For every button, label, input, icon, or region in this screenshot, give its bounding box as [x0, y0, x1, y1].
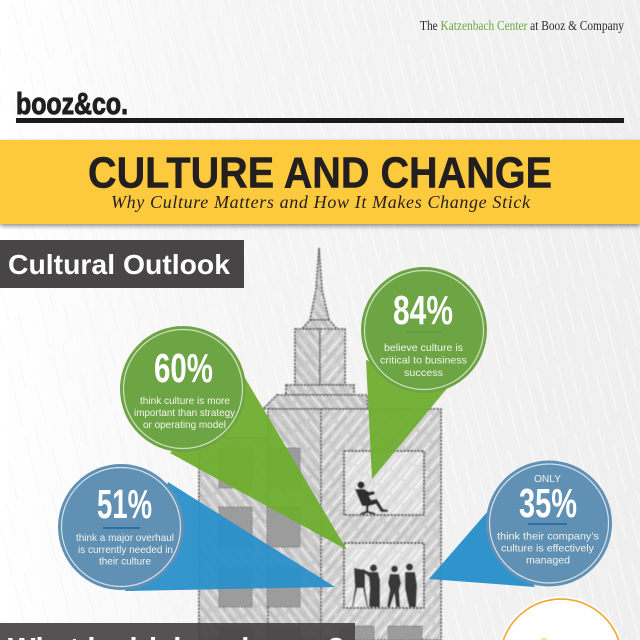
callout: 35%	[486, 460, 612, 586]
callout: 35%: 35%	[519, 480, 577, 526]
callout: 51%: their culture	[99, 556, 151, 568]
callout pointer: 84%	[366, 360, 449, 479]
callout: 35%: ONLY	[534, 473, 561, 485]
header rule	[16, 118, 624, 123]
callout: 84%: believe culture is	[384, 342, 463, 354]
organisation line: The Katzenbach Center at Booz & Company	[420, 18, 624, 33]
callout: 60%	[120, 326, 246, 452]
callout: 51%	[58, 464, 184, 590]
callout: 51%: think a major overhaul	[76, 532, 174, 544]
left wing windows	[219, 448, 422, 640]
title banner	[0, 140, 640, 224]
callout: 60%: or operating model	[143, 419, 226, 431]
callout: 60%: think culture is more	[140, 395, 230, 407]
callout: 51%: is currently needed in	[78, 544, 173, 556]
orange circle callout	[500, 596, 622, 640]
callout: 35%: managed	[526, 554, 570, 566]
section heading: Cultural Outlook	[0, 240, 244, 288]
callout: 84%: critical to business	[380, 354, 467, 366]
icon: seated executive	[355, 481, 388, 515]
subtitle: Why Culture Matters and How It Makes Change Stick	[111, 192, 531, 212]
callout: 35%: think their company’s	[497, 530, 599, 542]
icon: presentation team	[352, 563, 417, 607]
large windows	[344, 451, 424, 608]
logo: booz&co.	[16, 86, 128, 121]
title: CULTURE AND CHANGE	[88, 148, 552, 198]
callout: 84%	[361, 267, 487, 393]
callout: 60%: 60%	[154, 345, 213, 391]
callout: 84%: 84%	[393, 287, 453, 333]
section heading: Cultural Outlook: Cultural Outlook	[8, 249, 230, 280]
callout pointer: 35%	[429, 511, 535, 587]
callout: 51%: 51%	[97, 481, 152, 527]
callout: 35%: culture is effectively	[501, 542, 595, 554]
callout pointer: 51%	[125, 482, 335, 591]
callout: 84%: success	[404, 367, 443, 379]
callout pointer: 60%	[170, 378, 347, 550]
skyscraper illustration	[199, 248, 441, 640]
section heading: What is driving change	[0, 623, 355, 640]
callout: 60%: important than strategy	[134, 407, 236, 419]
